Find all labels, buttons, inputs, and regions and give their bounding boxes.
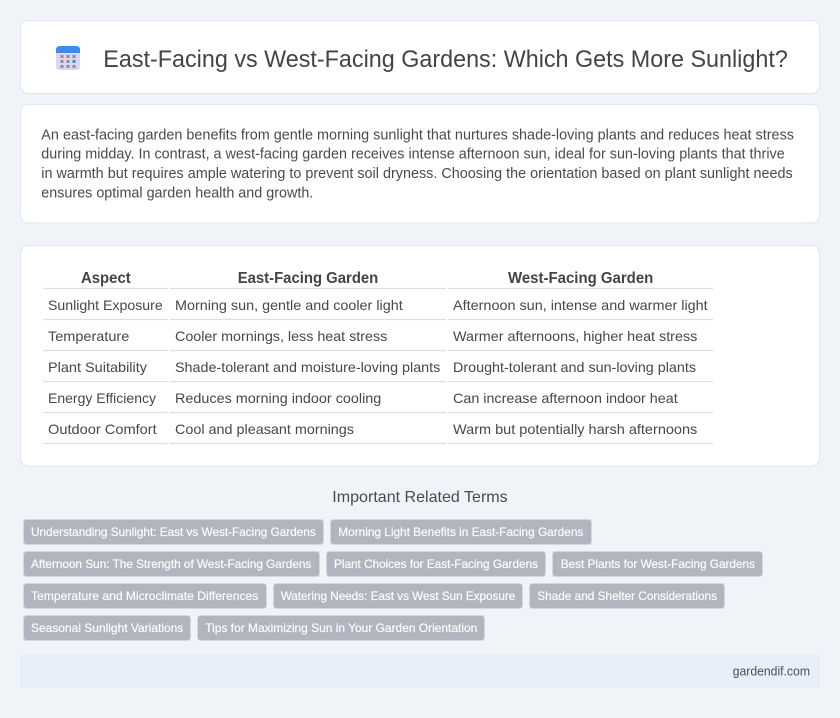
footer: gardendif.com <box>733 663 810 678</box>
text block: description <box>41 127 794 201</box>
text block: description: in warmth but requires ample watering to prevent soil dryness. Choosing the orientation based on plant sunlight needs <box>41 166 793 182</box>
tag <box>530 584 724 608</box>
text block: description: ensures optimal garden health and growth. <box>41 185 313 201</box>
tag <box>326 552 546 576</box>
tag: Understanding Sunlight: East vs West-Facing Gardens <box>31 525 316 539</box>
tag: Watering Needs: East vs West Sun Exposure <box>281 589 516 603</box>
table row: energy efficiency: Reduces morning indoor cooling <box>175 390 381 406</box>
table row: energy efficiency <box>48 390 678 406</box>
table row: temperature: Warmer afternoons, higher heat stress <box>453 328 697 344</box>
tag <box>24 616 190 640</box>
tag <box>552 552 762 576</box>
table row: outdoor comfort <box>48 421 697 437</box>
table row: energy efficiency: Can increase afternoon indoor heat <box>453 390 678 406</box>
table row: sunlight exposure: Afternoon sun, intense and warmer light <box>453 297 708 313</box>
footer <box>20 654 820 688</box>
tag: Tips for Maximizing Sun in Your Garden Orientation <box>205 621 477 635</box>
tag: Seasonal Sunlight Variations <box>31 621 183 635</box>
tag <box>24 552 320 576</box>
heading: important related terms: Important Related Terms <box>332 489 508 506</box>
panel: comparison table <box>20 246 820 466</box>
panel: intro paragraph <box>20 104 820 223</box>
icon: calendar <box>56 46 80 70</box>
table row: sunlight exposure: Sunlight Exposure <box>48 297 163 313</box>
tag <box>330 520 592 544</box>
title: East-Facing vs West-Facing Gardens: Which Gets More Sunlight? <box>103 46 788 73</box>
tag <box>274 584 522 608</box>
table row: plant suitability: Plant Suitability <box>48 359 147 375</box>
text block: description: An east-facing garden benefits from gentle morning sunlight that nurtures shade-loving plants and reduces heat stress <box>41 127 794 143</box>
tag: Plant Choices for East-Facing Gardens <box>334 557 538 571</box>
table row: sunlight exposure <box>48 297 708 313</box>
table row: temperature: Cooler mornings, less heat stress <box>175 328 387 344</box>
table row: outdoor comfort: Outdoor Comfort <box>48 421 157 437</box>
tag: Morning Light Benefits in East-Facing Gardens <box>338 525 583 539</box>
tag <box>198 616 484 640</box>
table row: temperature: Temperature <box>48 328 130 344</box>
table row: plant suitability: Drought-tolerant and sun-loving plants <box>453 359 696 375</box>
table row: energy efficiency: Energy Efficiency <box>48 390 156 406</box>
tag: Best Plants for West-Facing Gardens <box>561 557 755 571</box>
table row: sunlight exposure: Morning sun, gentle and cooler light <box>175 297 403 313</box>
table row: outdoor comfort: Cool and pleasant mornings <box>175 421 354 437</box>
tag: Shade and Shelter Considerations <box>537 589 717 603</box>
table header: West-Facing Garden <box>508 270 653 287</box>
table row: temperature <box>48 328 697 344</box>
tag: Temperature and Microclimate Differences <box>31 589 258 603</box>
tag: Afternoon Sun: The Strength of West-Facing Gardens <box>31 557 311 571</box>
text block: description: during midday. In contrast, a west-facing garden receives intense afternoon sun, ideal for sun-loving plants that thrive <box>41 147 785 163</box>
table row: plant suitability: Shade-tolerant and moisture-loving plants <box>175 359 440 375</box>
table header: Aspect <box>81 270 131 287</box>
panel: title header <box>20 20 820 94</box>
tag <box>24 584 266 608</box>
table header: East-Facing Garden <box>238 270 378 287</box>
panel: related term tags <box>24 520 762 640</box>
table row: plant suitability <box>48 359 696 375</box>
tag <box>24 520 324 544</box>
table row: outdoor comfort: Warm but potentially harsh afternoons <box>453 421 697 437</box>
table header <box>81 270 653 287</box>
